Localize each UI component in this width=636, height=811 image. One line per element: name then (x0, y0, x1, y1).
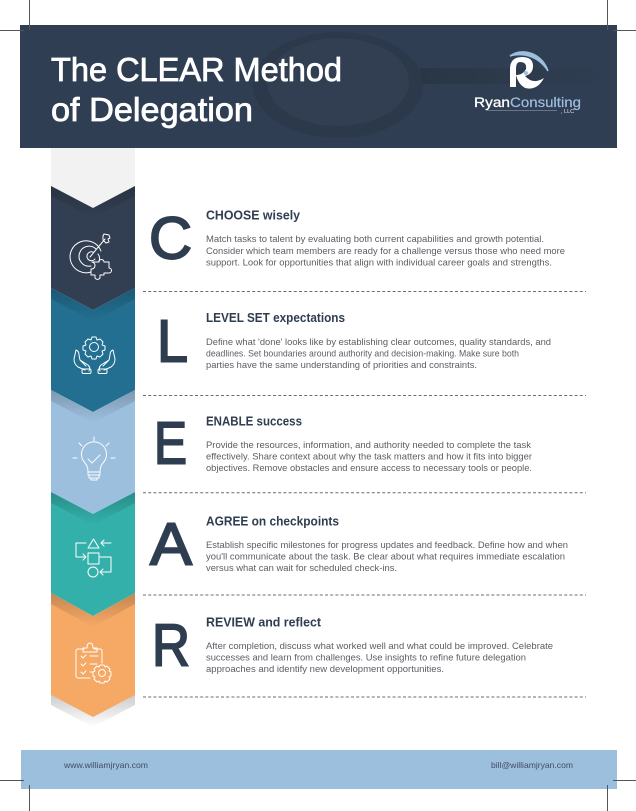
text block: level set: parties have the same understanding of priorities and constraints. (206, 360, 477, 371)
title (51, 51, 342, 128)
segment R: orange (51, 593, 135, 717)
text block: agree (206, 540, 568, 574)
segment C: dark navy (51, 186, 135, 310)
magnifying glass background (253, 32, 610, 138)
text block: enable: effectively. Share context about why the task matters and how it fits into bigger (206, 452, 532, 462)
icon: shapes flow (76, 539, 111, 577)
panel: review (206, 616, 553, 675)
heading: agree: AGREE on checkpoints (206, 514, 339, 528)
letter E: E (154, 410, 187, 476)
text block: enable: objectives. Remove obstacles and ensure access to necessary tools or people. (206, 463, 532, 474)
header banner (20, 25, 617, 148)
text block: enable (206, 440, 532, 474)
text block: choose: Match tasks to talent by evaluating both current capabilities and growth potential. (206, 234, 544, 245)
text block: choose (206, 234, 565, 268)
panel: level set (206, 311, 551, 371)
text block: choose: Consider which team members are ready for a challenge versus those who need more (206, 246, 565, 257)
panel: enable (206, 414, 532, 474)
logo: Ryan Consulting: , LLC (561, 109, 574, 115)
website: www.williamjryan.com (63, 760, 148, 770)
text block: enable: Provide the resources, information, and authority needed to complete the task (206, 440, 531, 451)
top light segment (51, 148, 135, 208)
text block: agree: versus what can wait for scheduled check-ins. (206, 563, 397, 574)
panel: agree (206, 514, 568, 574)
letter C: C (149, 206, 192, 272)
icon: target and puzzle (70, 234, 112, 279)
logo: Ryan Consulting (474, 52, 581, 115)
heading: enable: ENABLE success (206, 414, 302, 428)
heading: review: REVIEW and reflect (206, 616, 322, 630)
text block: level set (206, 337, 551, 371)
letter R: R (152, 612, 190, 678)
text block: review: approaches and identify new development opportunities. (206, 664, 444, 675)
heading: choose: CHOOSE wisely (206, 208, 300, 222)
panel: choose (206, 208, 565, 268)
icon: light bulb with check (73, 437, 115, 480)
text block: level set: deadlines. Set boundaries around authority and decision-making. Make sure both (206, 348, 519, 360)
segment A: teal (51, 492, 135, 616)
footer bar (21, 750, 617, 789)
text block: review (206, 641, 553, 675)
icon: clipboard and gear (76, 643, 111, 683)
heading: level set: LEVEL SET expectations (206, 311, 345, 325)
panel: chevron column (51, 148, 135, 727)
segment E: light blue (51, 390, 135, 514)
letter A: A (150, 512, 193, 578)
letter L: L (157, 308, 188, 374)
text block: choose: support. Look for opportunities that align with individual career goals and strengths. (206, 258, 552, 268)
text block: review: After completion, discuss what worked well and what could be improved. Celebrate (206, 641, 553, 652)
segment L: teal blue (51, 288, 135, 412)
title: The CLEAR Method (51, 51, 342, 88)
text block: agree: you'll communicate about the task. Be clear about what requires immediate escalation (206, 552, 565, 562)
text block: agree: Establish specific milestones for progress updates and feedback. Define how and when (206, 540, 568, 551)
email: bill@williamjryan.com (491, 760, 573, 770)
logo: Ryan Consulting: Ryan (474, 94, 510, 110)
icon: gear and hands (74, 337, 115, 374)
bottom shadow (51, 695, 135, 727)
text block: level set: Define what 'done' looks like by establishing clear outcomes, quality standards, and (206, 337, 551, 348)
logo: Ryan Consulting: Consulting (510, 94, 581, 110)
title: of Delegation (51, 91, 253, 128)
text block: review: successes and learn from challenges. Use insights to refine future delegation (206, 652, 526, 664)
